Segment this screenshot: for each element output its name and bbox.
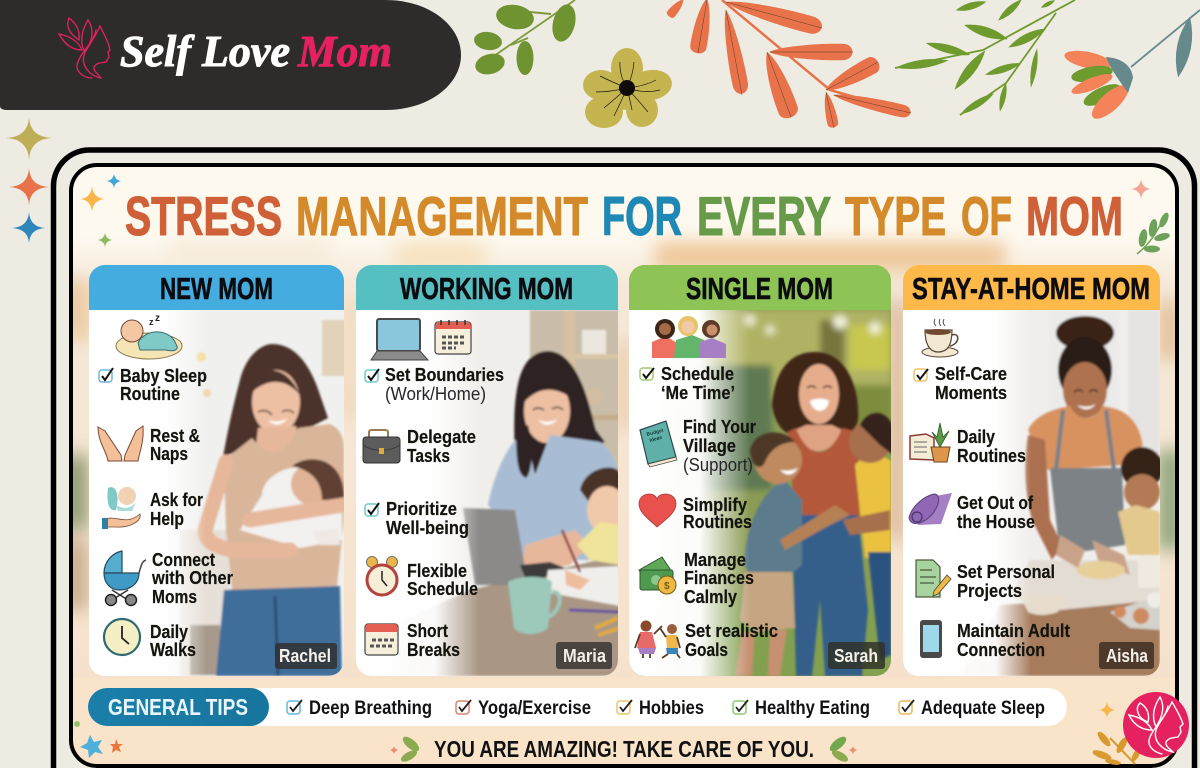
checkbox [365,503,379,516]
panel: single mom [629,265,895,680]
decoration: title sparkles and sprig [80,174,1171,254]
checkbox [99,368,113,382]
text: ask for help [150,489,203,529]
heading: SINGLE MOM [686,271,833,306]
icon: caring hands [98,426,143,461]
header band [356,265,618,310]
tip: yoga exercise: Yoga/Exercise [478,697,591,719]
name tag: sarah: Sarah [834,645,878,666]
icon: smartphone [920,620,942,658]
text: daily walks [150,621,196,660]
tip: adequate sleep: Adequate Sleep [921,697,1045,719]
text: connect with other moms: Moms [152,586,197,607]
photo: mother with newborn [180,320,346,676]
text: set personal projects: Set Personal [957,561,1055,582]
text: short breaks [407,620,460,660]
title: FOR [602,185,682,247]
text: find your village: (Support) [683,454,753,475]
text: maintain adult connection: Maintain Adult [957,620,1070,641]
general tips label: GENERAL TIPS [108,694,248,720]
panel: stay-at-home mom [903,265,1163,676]
text: simplify routines: Routines [683,511,752,532]
text: self-care moments [935,363,1007,403]
name tag: rachel: Rachel [279,645,331,666]
text: rest and naps: Rest & [150,425,200,446]
decoration: green branch left [473,0,579,78]
decoration: left leaves [390,734,422,764]
general tips bar [88,688,1067,726]
icon: group of women [652,316,726,358]
text: flexible schedule: Flexible [407,560,467,581]
text: find your village [683,416,756,475]
header band [629,265,891,310]
panel: new mom [89,265,346,676]
text: baby sleep routine: Routine [120,383,180,404]
text: daily walks: Daily [150,621,189,642]
text: daily walks: Walks [150,639,196,660]
icon: small calendar [365,624,398,655]
text: schedule me time: ‘Me Time’ [661,382,735,403]
text: flexible schedule: Schedule [407,578,478,599]
title: STRESS [125,185,282,247]
text: prioritize well-being: Prioritize [386,498,457,519]
icon: sleeping baby: z [155,313,160,324]
text: set personal projects [957,561,1055,601]
text: baby sleep routine: Baby Sleep [120,365,207,386]
header band [903,265,1160,310]
text: ask for help: Help [150,508,184,529]
icon: document and pencil [916,560,951,597]
photo: mother baking with toddler [996,311,1160,676]
header band [89,265,344,310]
text: baby sleep routine [120,365,207,404]
text: self-care moments: Moments [935,382,1007,403]
tip: hobbies: Hobbies [639,697,704,719]
brand name accent: Mom [297,27,392,76]
text: daily routines: Routines [957,445,1026,466]
icon: alarm clock [366,556,398,595]
text: set boundaries: Set Boundaries [385,364,504,385]
tip: deep breathing: Deep Breathing [309,697,432,719]
tip: hobbies [617,697,704,719]
photo: laughing mother with two boys [629,310,891,680]
icon: hand holding baby [102,487,140,529]
icon: budget book: Ideas [649,435,663,444]
text: manage finances calmly: Finances [684,567,754,588]
closing message [390,734,857,764]
text: short breaks: Short [407,620,448,641]
text: manage finances calmly [684,549,754,607]
text: flexible schedule [407,560,478,599]
checkbox [365,369,379,382]
icon: laptop [371,319,428,360]
title: OF [961,185,1012,247]
photo: mother on laptop with child [436,310,618,676]
text: delegate tasks: Delegate [407,426,476,447]
decoration: right leaves [827,734,857,764]
checkbox [914,369,928,381]
name tag: maria: Maria [563,645,607,666]
general tips label [88,688,269,726]
title: TYPE [845,185,946,247]
icon: brand logo face and leaves [59,18,110,78]
icon: wall clock [104,619,140,655]
inner frame [71,165,1177,766]
text: find your village: Village [683,435,736,456]
icon: budget book [640,421,677,467]
icon: briefcase [363,430,400,463]
text: manage finances calmly: Manage [684,549,746,570]
text: connect with other moms: with Other [151,567,233,588]
title: EVERY [697,185,831,247]
text: delegate tasks: Tasks [407,445,450,466]
panel: working mom [356,265,627,676]
blurred kitchen backdrop [62,240,1180,610]
title: MANAGEMENT [296,185,588,247]
text: set boundaries [385,364,504,404]
name tag: aisha: Aisha [1106,645,1149,666]
icon: coffee cup [922,319,958,357]
text: maintain adult connection [957,620,1070,660]
infographic sheet [62,165,1180,766]
heading: WORKING MOM [400,271,573,306]
text: set personal projects: Projects [957,580,1022,601]
text: daily routines: Daily [957,426,996,447]
decoration: yellow flower [583,48,674,128]
text: maintain adult connection: Connection [957,639,1045,660]
brand badge [1123,692,1189,758]
text: manage finances calmly: Calmly [684,586,738,607]
heading: NEW MOM [160,271,273,306]
text: rest and naps [150,425,200,464]
icon: sleeping baby: z [149,317,154,327]
text: get out of the house: the House [957,511,1035,532]
decoration: green leaf branch right [895,0,1075,118]
icon: badge face and leaves [1129,697,1183,754]
name tag: sarah [828,642,885,669]
icon: money and coin [639,557,676,594]
decoration: gold sparkle and sprig [1091,702,1142,766]
text: connect with other moms: Connect [152,549,215,570]
icon: budget book: Budget [646,428,664,438]
text: ask for help: Ask for [150,489,203,510]
icon: book and potted plant [910,423,950,462]
text: rest and naps: Naps [150,443,188,464]
title: MOM [1026,185,1123,247]
text: set boundaries: (Work/Home) [385,383,486,404]
title [125,185,1123,247]
text: set realistic goals: Goals [685,639,728,660]
brand name: Self Love [120,27,290,76]
tip: healthy eating: Healthy Eating [755,697,870,719]
text: get out of the house: Get Out of [957,492,1034,513]
text: set realistic goals: Set realistic [685,620,778,641]
text: daily routines [957,426,1026,466]
message text: YOU ARE AMAZING! TAKE CARE OF YOU. [434,736,814,762]
text: prioritize well-being: Well-being [386,517,469,538]
text: connect with other moms [151,549,233,607]
icon: rolled yoga mat [909,493,952,525]
text: schedule me time: Schedule [661,363,734,384]
brand header pill [0,0,461,110]
outer frame [54,150,1194,768]
icon: sleeping baby [116,313,182,359]
name tag: maria [556,642,612,669]
text: schedule me time [661,363,735,403]
text: simplify routines: Simplify [683,494,748,515]
decoration: tulip flower [1063,10,1200,124]
decoration: footer stars [74,721,123,758]
text: short breaks: Breaks [407,639,460,660]
text: set realistic goals [685,620,778,660]
text: get out of the house [957,492,1035,532]
icon: money and coin: $ [664,581,670,592]
text: find your village: Find Your [683,416,756,437]
name tag: aisha [1099,642,1154,669]
icon: two playing kids [635,620,680,658]
icon: wall calendar [435,320,471,354]
decoration: orange leaf branch [665,0,912,129]
text: prioritize well-being [386,498,469,538]
text: delegate tasks [407,426,476,466]
icon: heart [639,494,676,527]
checkbox [640,368,654,380]
text: self-care moments: Self-Care [935,363,1007,384]
decoration: column of sparkles [6,117,52,243]
icon: baby stroller [104,551,146,606]
text: simplify routines [683,494,752,532]
